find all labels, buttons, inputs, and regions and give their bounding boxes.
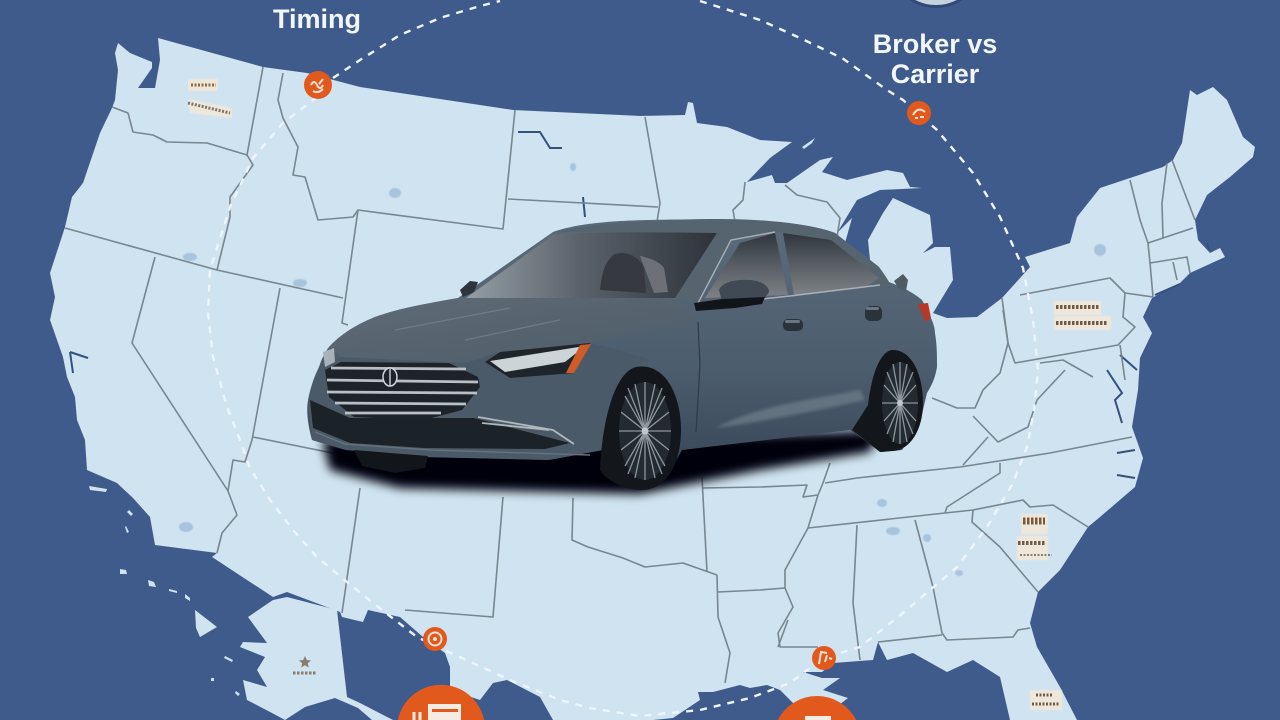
door shutline [696,322,700,432]
islands [89,138,815,696]
tail light [918,303,931,322]
front side window [705,233,788,298]
heading: Timing: Timing [273,4,361,34]
far side mirror [460,281,478,297]
side mirror [719,280,769,302]
grille [325,362,480,420]
lakes [179,163,1106,576]
heading: Broker vs Carrier: Carrier [891,59,980,89]
front seats [600,253,646,293]
car [307,219,937,494]
headlight [485,343,591,378]
state borders [65,67,1195,683]
body highlight [715,390,865,428]
chrome window trim [697,232,880,306]
windshield [466,232,717,298]
hood [329,298,698,363]
dashed route circle [208,1,1038,716]
ground shadow [322,430,880,494]
corner lamp [323,348,335,367]
faded state labels [188,79,1111,710]
badge: bottom right, cropped [778,696,856,720]
heading: Broker vs Carrier: Broker vs [873,29,997,59]
lower bumper [310,400,590,473]
inland water and bays [70,132,1209,478]
door handles [783,306,882,331]
body silhouette [307,220,937,487]
rear side window [783,233,879,295]
Alaska [240,597,393,720]
front fascia [308,343,650,460]
marker: Timing [304,71,332,99]
badge: bottom left, cropped [398,685,484,720]
rear wheel [852,350,923,452]
far side detail [894,274,908,291]
marker: southwest [423,627,447,651]
roof rail and pillars [553,219,889,303]
front wheel [600,366,681,490]
marker: southeast [812,646,836,670]
top circle badge, cropped [909,0,963,8]
marker: Broker vs Carrier [907,101,931,125]
